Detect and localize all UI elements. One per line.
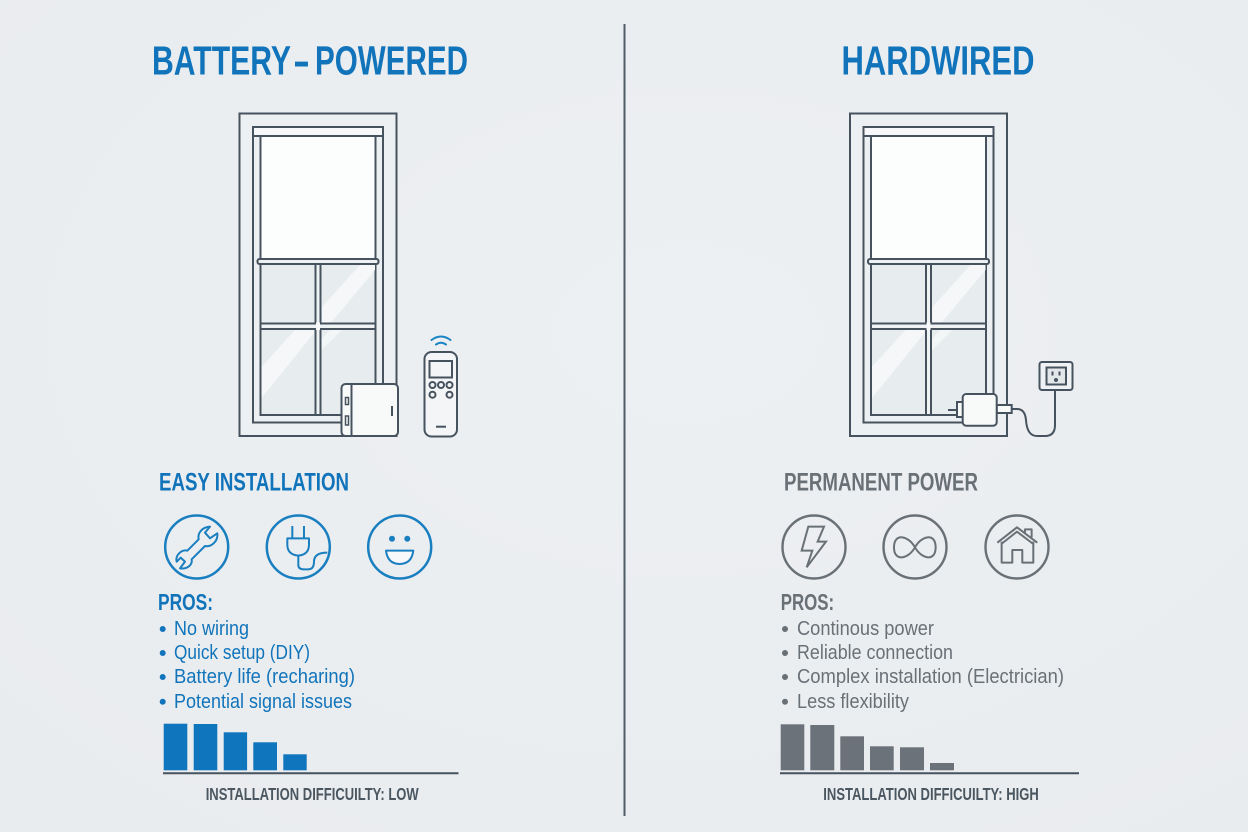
icon: power adapter and cable <box>948 385 1055 436</box>
bar chart: installation difficulty high <box>780 724 1079 773</box>
pros list: hardwired: Complex installation (Electrician) <box>797 665 1064 688</box>
illustration: window with roller shade <box>240 114 396 436</box>
pros list: hardwired: Reliable connection <box>797 641 953 664</box>
panel: battery-powered <box>152 38 468 804</box>
pros list: hardwired: Continous power <box>797 617 934 640</box>
title: hardwired: HARDWIRED <box>842 38 1034 84</box>
heading: permanent power: PERMANENT POWER <box>784 468 978 496</box>
caption: installation difficulty low: INSTALLATION DIFFICUILTY: LOW <box>206 784 419 804</box>
illustration: window with roller shade <box>850 114 1007 436</box>
pros list: battery-powered: Potential signal issues <box>174 690 352 713</box>
icon: remote control <box>424 352 457 436</box>
icon: smiley <box>368 516 431 578</box>
caption: installation difficulty high: INSTALLATION DIFFICUILTY: HIGH <box>823 784 1039 804</box>
title: battery-powered: POWERED <box>315 38 468 84</box>
pros list: battery-powered: No wiring <box>174 617 249 640</box>
pros list: battery-powered: PROS: <box>158 589 213 615</box>
bar chart: installation difficulty low <box>163 724 458 773</box>
divider <box>624 24 626 816</box>
pros list: hardwired: Less flexibility <box>797 690 910 713</box>
icon: battery motor box <box>342 384 398 436</box>
pros list: hardwired: PROS: <box>781 589 834 615</box>
pros list: battery-powered <box>158 589 355 713</box>
icon: infinity <box>884 516 946 578</box>
panel: hardwired <box>780 38 1079 804</box>
icon: wireless signal <box>432 336 450 344</box>
icon: wrench <box>165 516 228 578</box>
icon: house <box>986 516 1048 578</box>
heading: easy installation: EASY INSTALLATION <box>159 468 349 496</box>
pros list: battery-powered: Battery life (recharing) <box>174 665 355 688</box>
title: battery-powered: - <box>293 38 310 84</box>
title: battery-powered: BATTERY <box>152 38 291 84</box>
pros list: battery-powered: Quick setup (DIY) <box>174 641 310 664</box>
pros list: hardwired <box>781 589 1064 713</box>
icon: wall outlet <box>1040 362 1072 390</box>
icon: plug <box>267 516 330 578</box>
icon: lightning bolt <box>782 516 846 578</box>
